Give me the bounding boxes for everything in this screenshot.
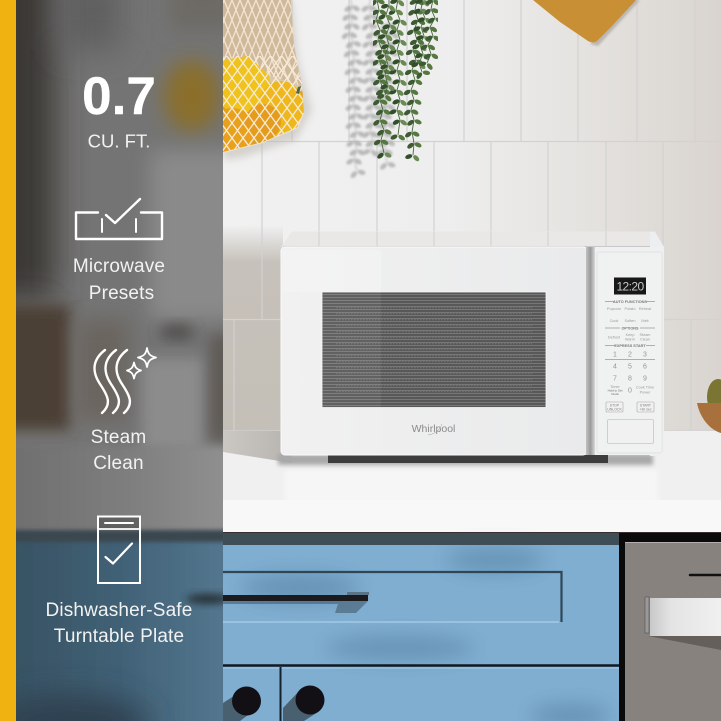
button labels: Popcorn [607, 307, 621, 311]
icon: steam clean [95, 348, 156, 413]
cabinet door gaps [223, 664, 619, 667]
digital clock display: 12:20 [616, 280, 644, 294]
button labels: Reheat [639, 307, 652, 311]
label: dishwasher-safe turntable plate: Turntable Plate [54, 626, 184, 647]
microwave [278, 232, 664, 465]
button labels: 9 [643, 376, 647, 382]
fruit bowl [697, 379, 721, 433]
microwave feet [328, 455, 608, 463]
start button: +30 sec [639, 408, 652, 412]
dishwasher [619, 533, 721, 721]
microwave door [281, 247, 587, 455]
stop button [606, 402, 623, 412]
knob shadows [223, 690, 318, 721]
button labels: Defrost [608, 336, 621, 340]
button labels: EXPRESS START [614, 344, 646, 348]
microwave shadow on counter [278, 454, 653, 465]
button labels: 0 [628, 388, 632, 394]
icon: presets check box [76, 199, 162, 239]
label: microwave presets: Presets [89, 283, 154, 304]
plant shadow on wall [349, 0, 391, 171]
blurred wall lower [147, 144, 223, 324]
blurred top tones [0, 0, 55, 300]
button labels: Cook [610, 319, 619, 323]
button labels: AUTO FUNCTIONS [613, 300, 647, 304]
capacity value: 0.7 [82, 67, 156, 126]
cabinet knobs [232, 686, 324, 716]
drawer handle [223, 595, 368, 601]
label: dishwasher-safe turntable plate: Dishwasher-Safe [46, 600, 192, 621]
dishwasher handle shadow [648, 636, 721, 650]
button labels: Timer [610, 385, 621, 389]
start button [637, 402, 654, 412]
counter top [223, 431, 721, 534]
button labels: OPTIONS [621, 326, 639, 330]
cabinet shading [240, 548, 610, 721]
label: microwave presets [73, 256, 165, 304]
stop button: UNLOCK [607, 408, 622, 412]
door release button [608, 420, 654, 444]
yellow side bar [0, 0, 16, 721]
digital clock display [614, 278, 646, 294]
blurred cabinets [16, 540, 223, 721]
icon: dishwasher safe plate [98, 516, 140, 583]
door window [322, 292, 546, 408]
net bag with lemons [223, 0, 314, 162]
label: steam clean: Clean [93, 453, 144, 474]
stop button: STOP [610, 403, 620, 407]
button labels: 6 [643, 364, 647, 370]
brand logo: Whirlpool [412, 423, 455, 435]
capacity value [82, 67, 156, 152]
label: steam clean [91, 427, 146, 474]
translucent left panel [16, 0, 223, 721]
button labels: 8 [628, 376, 632, 382]
button labels: Clock [611, 392, 619, 396]
hanging cloth corner [533, 0, 640, 46]
microwave top [281, 232, 664, 247]
button labels: 5 [628, 364, 632, 370]
button labels [605, 300, 655, 396]
label: dishwasher-safe turntable plate [46, 600, 192, 647]
label: microwave presets: Microwave [73, 256, 165, 277]
kitchen wall with tiles [223, 0, 721, 432]
button labels: Soften [625, 319, 635, 323]
button labels: 1 [613, 352, 617, 358]
drawer handle shadow [223, 601, 368, 613]
dishwasher handle [650, 598, 721, 636]
hanging plant [376, 0, 435, 155]
button labels: Clean [640, 338, 650, 342]
microwave body side [650, 232, 664, 456]
button labels: 4 [613, 364, 617, 370]
silver handle strip [586, 247, 595, 455]
blurred counter [116, 443, 223, 531]
blue cabinets [223, 533, 619, 721]
start button: START [640, 403, 652, 407]
button labels: 2 [628, 352, 632, 358]
door reflection [283, 250, 381, 292]
button labels: Warm [625, 338, 635, 342]
capacity value: CU. FT. [88, 130, 150, 152]
button labels: Power [640, 390, 651, 394]
control panel [595, 247, 663, 455]
button labels: Hold to Set [608, 388, 623, 392]
blurred lemons [164, 60, 220, 132]
label: steam clean: Steam [91, 427, 146, 448]
button labels: Steam [640, 333, 650, 337]
button labels: 3 [643, 352, 647, 358]
button labels: Keep [626, 333, 634, 337]
button labels: Cook Time [636, 386, 654, 390]
button labels: 7 [613, 376, 617, 382]
button labels: Melt [641, 319, 650, 323]
button labels: Potato [625, 307, 635, 311]
drawer groove [223, 572, 562, 622]
